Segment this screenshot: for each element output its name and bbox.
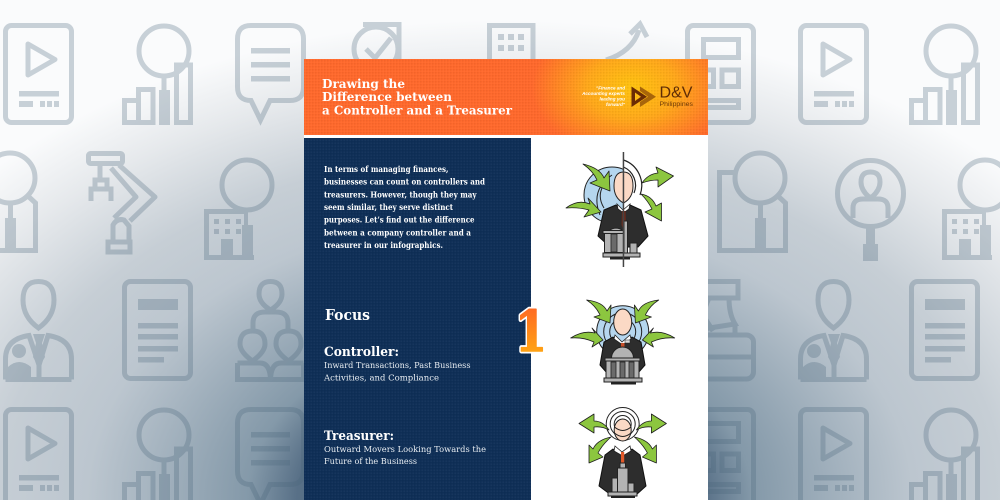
text: controller: Activities, and Compliance (323, 373, 439, 383)
icon: magnifier over building (206, 160, 272, 260)
icon: video document (6, 26, 72, 122)
icon: video document lower (6, 410, 72, 500)
heading: focus: Focus (325, 306, 370, 324)
icon: growth arrow (606, 24, 647, 60)
intro paragraph (324, 164, 485, 250)
title: Difference between (322, 89, 452, 104)
arrow: inward (571, 328, 603, 347)
panel: infographic sheet (304, 59, 708, 500)
icon: magnifier over person (838, 160, 904, 261)
number badge: 1: 1 (515, 299, 547, 365)
arrow: inward (634, 300, 659, 323)
icon: video document right (800, 26, 866, 122)
figure: treasurer (579, 408, 666, 498)
icon: group of people (238, 282, 304, 380)
icon: magnifier over document right (720, 153, 786, 253)
text: treasurer: Treasurer: (324, 429, 394, 444)
icon: speech bubble lower (238, 410, 304, 500)
figure: controller and treasurer split (566, 152, 674, 267)
icon: magnifier over building right (944, 160, 1000, 260)
intro paragraph: seem similar, they serve distinct (324, 202, 453, 213)
icon: businessperson right (800, 282, 866, 382)
icon: text document right (912, 282, 978, 378)
icon: speech bubble (238, 26, 304, 120)
tagline: forward" (606, 102, 626, 107)
intro paragraph: purposes. Let’s find out the difference (324, 215, 474, 225)
number badge: 1: 1 (515, 299, 547, 365)
icon: magnifier bar chart lower right (912, 410, 978, 500)
intro paragraph: businesses can count on controllers and (324, 177, 485, 187)
arrow: inward (587, 300, 611, 323)
intro paragraph: treasurer in our infographics. (324, 240, 443, 250)
figure: controller (571, 300, 675, 384)
title: a Controller and a Treasurer (322, 102, 512, 118)
icon: video document lower right (800, 410, 866, 500)
logo: D&amp;V Philippines (632, 84, 693, 108)
text: treasurer: Outward Movers Looking Towards the (324, 444, 486, 454)
panel: navy text column (304, 138, 531, 500)
intro paragraph: In terms of managing finances, (324, 164, 449, 175)
icon: page layout lower (688, 410, 754, 500)
text: controller: Inward Transactions, Past Business (324, 360, 470, 370)
tagline: leading you (599, 96, 625, 102)
divider line (623, 152, 624, 267)
logo: D&amp;V Philippines: D&V (660, 84, 693, 102)
text: treasurer: Future of the Business (324, 456, 417, 466)
text: controller: Controller: (324, 345, 399, 360)
icon: magnifier bar chart lower (124, 410, 190, 500)
icon: robot arm (88, 154, 155, 252)
icon: magnifier over bar chart right (912, 26, 978, 125)
panel: orange header (304, 59, 708, 135)
tagline: Accounting experts (581, 91, 625, 96)
text: treasurer (324, 429, 486, 466)
arrow: outward (634, 437, 656, 463)
arrow: outward (579, 414, 609, 433)
icon: text document (124, 282, 190, 378)
title (322, 76, 512, 118)
icon: page layout (688, 26, 754, 122)
logo: D&amp;V Philippines: Philippines (660, 102, 693, 108)
arrow: inward (642, 328, 675, 347)
text: controller (323, 345, 470, 383)
title: Drawing the (322, 76, 405, 91)
icon: checklist magnifier (354, 24, 399, 82)
intro paragraph: treasurers. However, though they may (324, 189, 478, 200)
icon: person on stack (688, 282, 754, 379)
arrow: outward (636, 414, 666, 433)
icon: businessperson (6, 282, 72, 382)
intro paragraph: between a company controller and a (324, 227, 472, 237)
tagline (581, 86, 626, 107)
icon: office building (490, 26, 533, 63)
icon: magnifier over document left (0, 153, 36, 253)
arrow: outward (589, 437, 611, 463)
icon: magnifier over bar chart (124, 26, 190, 125)
tagline: "Finance and (596, 86, 625, 90)
